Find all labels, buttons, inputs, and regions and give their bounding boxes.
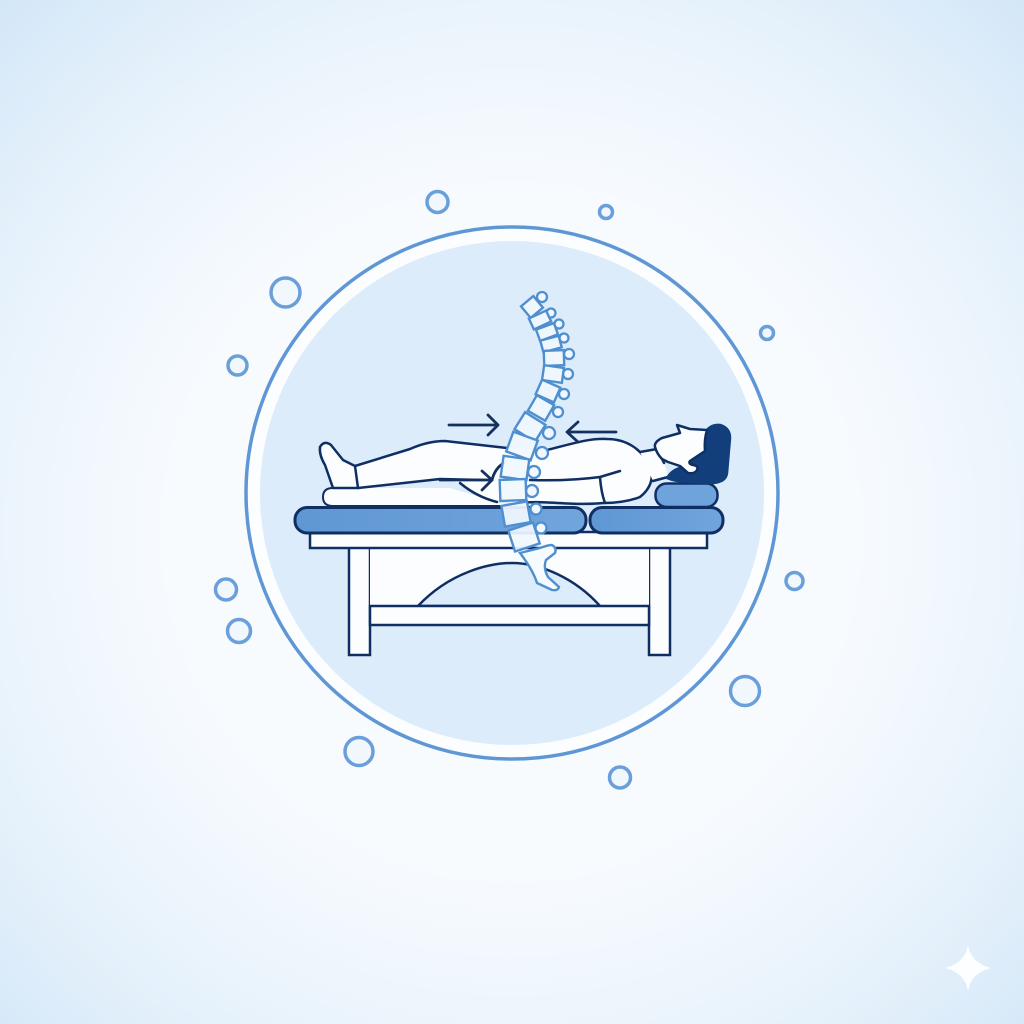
hair [667, 425, 730, 483]
spinous process knobs [526, 292, 574, 534]
table underside panel [370, 548, 649, 606]
sacrum [520, 545, 559, 590]
pressure arrows [440, 415, 616, 490]
table frame [310, 532, 707, 548]
arrow right lower [440, 471, 492, 490]
face [655, 425, 707, 473]
arrow right upper [449, 415, 498, 435]
hip line [460, 483, 497, 502]
arm [530, 471, 620, 503]
neck [640, 449, 668, 481]
vertebrae bodies [500, 296, 564, 551]
curved arrow tail [492, 463, 504, 480]
table pad right [590, 508, 723, 533]
foot [320, 443, 358, 488]
leg cushion [323, 488, 520, 506]
body fill [355, 439, 668, 504]
decorative bubbles [216, 192, 803, 788]
massage table [295, 508, 723, 655]
table support arch [418, 563, 600, 606]
patient lying on table [320, 425, 730, 506]
spine [500, 292, 574, 590]
head pillow [656, 484, 718, 507]
table legs [349, 546, 670, 655]
corner sparkle [945, 945, 991, 991]
table crossbar [370, 606, 649, 625]
leg outline lower [355, 466, 483, 488]
table pad left [295, 508, 586, 533]
arrow left upper [567, 422, 616, 442]
body outline upper [355, 439, 652, 504]
main circle badge [246, 227, 778, 759]
